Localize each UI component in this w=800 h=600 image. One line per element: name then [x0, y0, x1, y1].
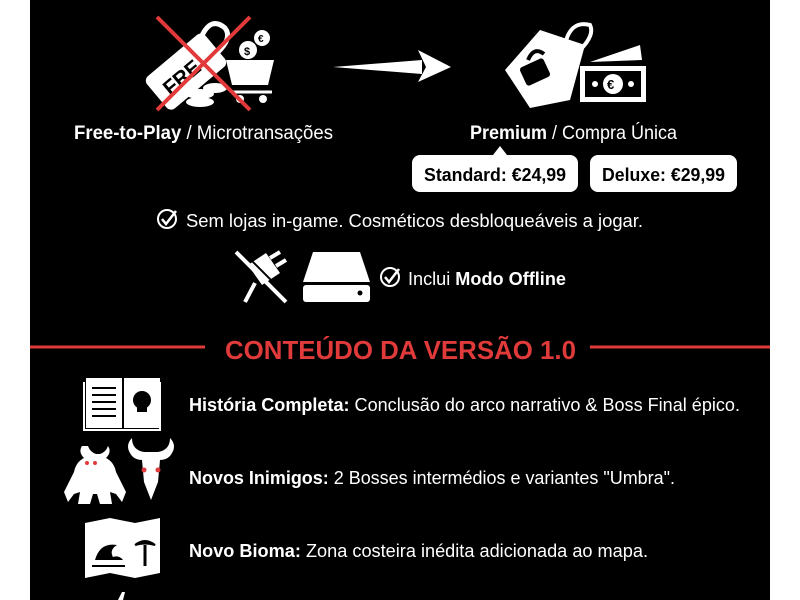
icon: map with biome [85, 518, 160, 578]
icon: unplugged [236, 249, 290, 302]
text: premium label: Premium / Compra Única [470, 122, 677, 144]
text: new biome: Novo Bioma: Zona costeira inédita adicionada ao mapa. [189, 541, 648, 561]
pill: standard price [412, 146, 578, 192]
icon: drive [303, 252, 370, 302]
icon: free-to-play crossed out: FRE [159, 56, 206, 100]
icon: free-to-play crossed out: $ [244, 46, 250, 58]
pill: standard price: Standard: €24,99 [424, 165, 566, 185]
text: full story: História Completa: Conclusão do arco narrativo & Boss Final épico. [189, 395, 740, 415]
pill: deluxe price: Deluxe: €29,99 [602, 165, 725, 185]
text: offline mode: Inclui Modo Offline [408, 269, 566, 289]
icon: partial next item [118, 592, 125, 600]
icon: premium tag and money: € [607, 77, 614, 92]
heading: section title with red lines: CONTEÚDO DA VERSÃO 1.0 [225, 335, 576, 365]
text: no in-game stores: Sem lojas in-game. Cosméticos desbloqueáveis a jogar. [186, 211, 643, 231]
arrow [333, 50, 451, 82]
text: free-to-play label: Free-to-Play / Microtransações [74, 123, 333, 144]
pill: deluxe price [590, 155, 737, 192]
icon: premium tag and money [505, 24, 646, 108]
icon: book with skull [84, 378, 160, 430]
icon: free-to-play crossed out: € [258, 34, 264, 45]
icon: monsters [64, 438, 174, 504]
icon: free-to-play crossed out [143, 17, 274, 112]
text: new enemies: Novos Inimigos: 2 Bosses intermédios e variantes "Umbra". [189, 468, 675, 488]
